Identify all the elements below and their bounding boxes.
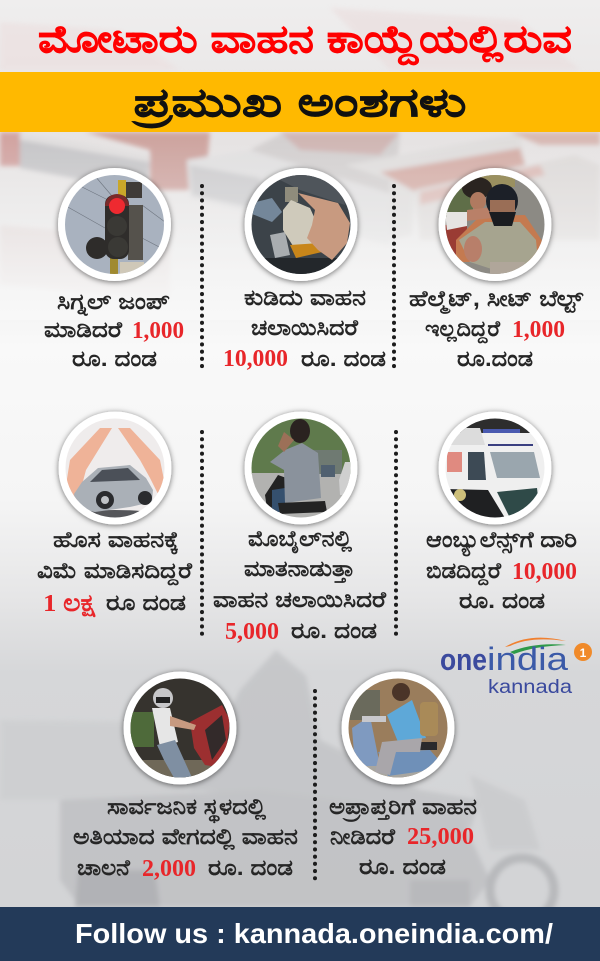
logo: oneindia kannada	[440, 638, 592, 698]
panel: ambulance	[426, 412, 577, 613]
text: 5,000	[225, 619, 279, 645]
text: ಸಾರ್ವಜನಿಕ ಸ್ಥಳದಲ್ಲಿ	[107, 794, 267, 825]
panel: drunk driving	[223, 168, 386, 372]
text: ರೂ ದಂಡ	[106, 590, 186, 615]
panel: insurance	[37, 412, 193, 618]
text: ರೂ. ದಂಡ	[359, 854, 446, 879]
text: ಮಾತನಾಡುತ್ತಾ	[244, 556, 355, 584]
text: ವಾಹನ ಚಲಾಯಿಸಿದರೆ	[213, 587, 387, 612]
text	[44, 289, 184, 371]
panel: signal jump	[44, 168, 184, 371]
text: 25,000	[407, 824, 474, 850]
text	[409, 286, 584, 371]
text: ನೀಡಿದರೆ	[330, 824, 396, 849]
icon: car in hands photo	[58, 412, 172, 525]
panel: helmet and seat belt	[409, 168, 584, 371]
text	[73, 794, 298, 882]
text: 1 ಲಕ್ಷ	[43, 591, 96, 618]
text: ಮಾಡಿದರೆ	[44, 317, 123, 342]
text: 2,000	[142, 856, 196, 882]
footer: Follow us : kannada.oneindia.com/	[75, 918, 553, 949]
subtitle band: ಪ್ರಮುಖ ಅಂಶಗಳು	[131, 81, 466, 128]
text: ಇಲ್ಲದಿದ್ದರೆ	[425, 316, 501, 345]
text: 1,000	[132, 318, 184, 344]
text	[37, 527, 193, 618]
text: ರೂ. ದಂಡ	[72, 346, 157, 371]
text	[223, 285, 386, 372]
logo: oneindia kannada: 1	[580, 646, 587, 660]
text: ಆಂಬ್ಯುಲೆನ್ಸ್‌ಗೆ ದಾರಿ	[426, 527, 577, 558]
text: ಹೆಲ್ಮೆಟ್, ಸೀಟ್ ಬೆಲ್ಟ್	[409, 286, 584, 315]
footer	[0, 907, 600, 961]
dotted divider lines	[202, 186, 396, 880]
logo: oneindia kannada: india	[487, 641, 568, 677]
logo: oneindia kannada: kannada	[488, 677, 572, 698]
text: ಹೊಸ ವಾಹನಕ್ಕೆ	[53, 527, 179, 555]
text: ರೂ.ದಂಡ	[457, 346, 533, 371]
text: ರೂ. ದಂಡ	[291, 618, 377, 643]
text	[329, 794, 477, 879]
text: ಚಾಲನೆ	[77, 855, 131, 880]
text: 10,000	[223, 346, 288, 372]
icon: stunt bike photo	[124, 672, 236, 790]
text: ರೂ. ದಂಡ	[459, 588, 545, 613]
text: ವಿಮೆ ಮಾಡಿಸದಿದ್ದರೆ	[37, 558, 193, 587]
panel: mobile phone while driving	[213, 412, 387, 645]
text: ರೂ. ದಂಡ	[301, 346, 386, 371]
text: ಮೊಬೈಲ್‌ನಲ್ಲಿ	[248, 526, 353, 555]
title line: ಮೋಟಾರು ವಾಹನ ಕಾಯ್ದೆಯಲ್ಲಿರುವ	[38, 19, 572, 65]
text	[213, 526, 387, 645]
icon: traffic light photo	[58, 168, 171, 281]
text: ಸಿಗ್ನಲ್ ಜಂಪ್	[57, 289, 170, 317]
logo: oneindia kannada: one	[440, 642, 487, 677]
text	[426, 527, 577, 613]
motorcycle rider backdrop	[0, 650, 554, 922]
bus depot backdrop	[0, 8, 600, 300]
text: 10,000	[512, 559, 577, 585]
icon: helmet rider photo	[438, 168, 552, 281]
icon: bottle photo	[244, 168, 360, 281]
text: ರೂ. ದಂಡ	[208, 855, 293, 880]
text: ಕುಡಿದು ವಾಹನ	[244, 285, 366, 310]
text: ಅಪ್ರಾಪ್ತರಿಗೆ ವಾಹನ	[329, 794, 477, 822]
text: ಅತಿಯಾದ ವೇಗದಲ್ಲಿ ವಾಹನ	[73, 824, 298, 851]
icon: rider on phone photo	[244, 412, 360, 528]
text: ಬಿಡದಿದ್ದರೆ	[426, 558, 502, 587]
panel: public speeding	[73, 672, 298, 882]
panel: minors driving	[329, 672, 477, 879]
text: ಚಲಾಯಿಸಿದರೆ	[251, 315, 359, 340]
icon: ambulance photo	[438, 412, 552, 525]
text: 1,000	[512, 317, 565, 343]
subtitle band	[0, 72, 600, 132]
icon: schoolboy on scooter photo	[342, 672, 455, 786]
